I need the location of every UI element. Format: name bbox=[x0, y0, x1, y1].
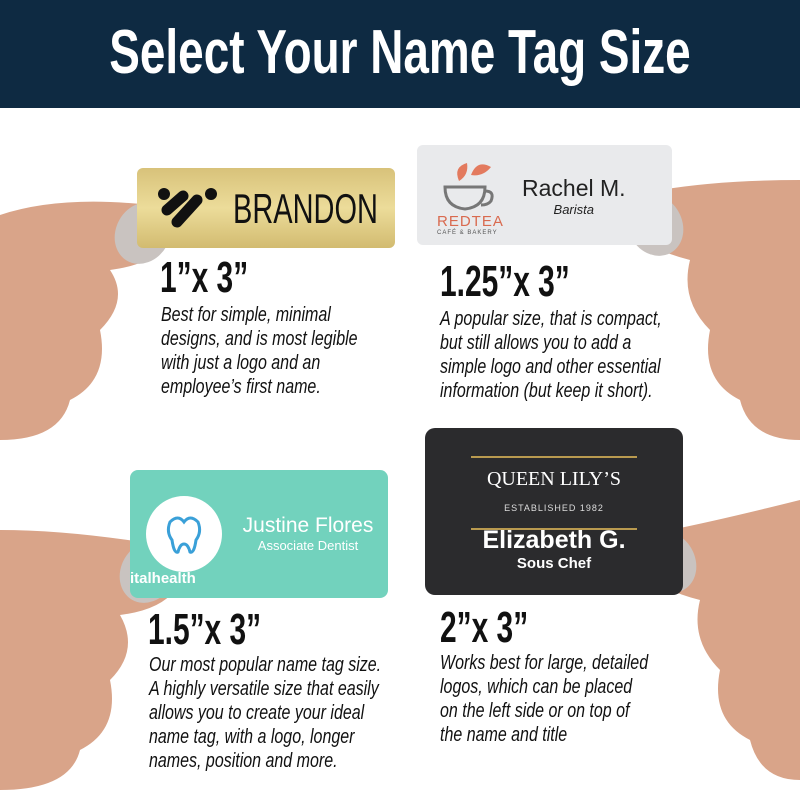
desc 2x3 bbox=[440, 652, 649, 746]
desc 1.5x3: allows you to create your ideal bbox=[149, 702, 364, 724]
size label 1.25x3: 1.25”x 3” bbox=[440, 257, 570, 306]
desc 1.25x3: information (but keep it short). bbox=[440, 380, 653, 402]
name bbox=[243, 514, 373, 553]
desc 1.5x3 bbox=[148, 654, 381, 772]
hand: bottom left bbox=[0, 530, 187, 790]
desc 2x3: the name and title bbox=[440, 724, 567, 746]
name bbox=[522, 175, 626, 217]
desc 1x3: Best for simple, minimal bbox=[161, 304, 331, 326]
desc 1.5x3: name tag, with a logo, longer bbox=[149, 726, 354, 748]
logo text: italhealth bbox=[130, 570, 196, 587]
name: Associate Dentist bbox=[258, 538, 358, 553]
logo: queen lily's: QUEEN LILY’S bbox=[487, 468, 621, 490]
tag: white 1.25x3 bbox=[417, 145, 672, 245]
desc 1x3 bbox=[161, 304, 358, 398]
desc 1.25x3: A popular size, that is compact, bbox=[440, 308, 662, 330]
icon: tooth logo bbox=[146, 496, 222, 572]
title: Select Your Name Tag Size bbox=[109, 18, 691, 87]
size label 1x3: 1”x 3” bbox=[160, 253, 248, 302]
desc 1.5x3: names, position and more. bbox=[149, 750, 338, 772]
name: Elizabeth G. bbox=[482, 526, 626, 554]
desc 1.5x3: Our most popular name tag size. bbox=[149, 654, 381, 676]
hand: top right bbox=[616, 180, 800, 440]
desc 1.25x3: but still allows you to add a bbox=[440, 332, 631, 354]
header bbox=[0, 0, 800, 108]
logo: queen lily's: ESTABLISHED 1982 bbox=[504, 503, 604, 513]
logo text: CAFÉ & BAKERY bbox=[437, 230, 498, 236]
name: Rachel M. bbox=[522, 175, 626, 201]
name bbox=[482, 526, 626, 572]
logo: queen lily's bbox=[471, 456, 637, 530]
desc 2x3: logos, which can be placed bbox=[440, 676, 632, 698]
size label 1.5x3: 1.5”x 3” bbox=[148, 605, 261, 654]
desc 1.5x3: A highly versatile size that easily bbox=[149, 678, 379, 700]
size label 2x3: 2”x 3” bbox=[440, 603, 528, 652]
hand: bottom right bbox=[629, 500, 800, 780]
hand: top left bbox=[0, 192, 182, 440]
name: Justine Flores bbox=[243, 514, 373, 537]
desc 2x3: on the left side or on top of bbox=[440, 700, 629, 722]
name: Barista bbox=[554, 202, 594, 217]
icon: cup logo bbox=[444, 163, 494, 210]
name: BRANDON bbox=[233, 185, 378, 232]
desc 2x3: Works best for large, detailed bbox=[440, 652, 648, 674]
name: Sous Chef bbox=[517, 555, 591, 572]
tag: black 2x3 bbox=[425, 428, 683, 595]
desc 1x3: designs, and is most legible bbox=[161, 328, 358, 350]
tag: teal 1.5x3 bbox=[130, 470, 388, 598]
icon: logo bbox=[158, 188, 217, 228]
tag: gold 1x3 bbox=[137, 168, 395, 248]
desc 1.25x3: simple logo and other essential bbox=[440, 356, 661, 378]
desc 1x3: employee’s first name. bbox=[161, 376, 321, 398]
desc 1.25x3 bbox=[439, 308, 662, 402]
logo text: REDTEA bbox=[437, 213, 504, 230]
desc 1x3: with just a logo and an bbox=[161, 352, 320, 374]
